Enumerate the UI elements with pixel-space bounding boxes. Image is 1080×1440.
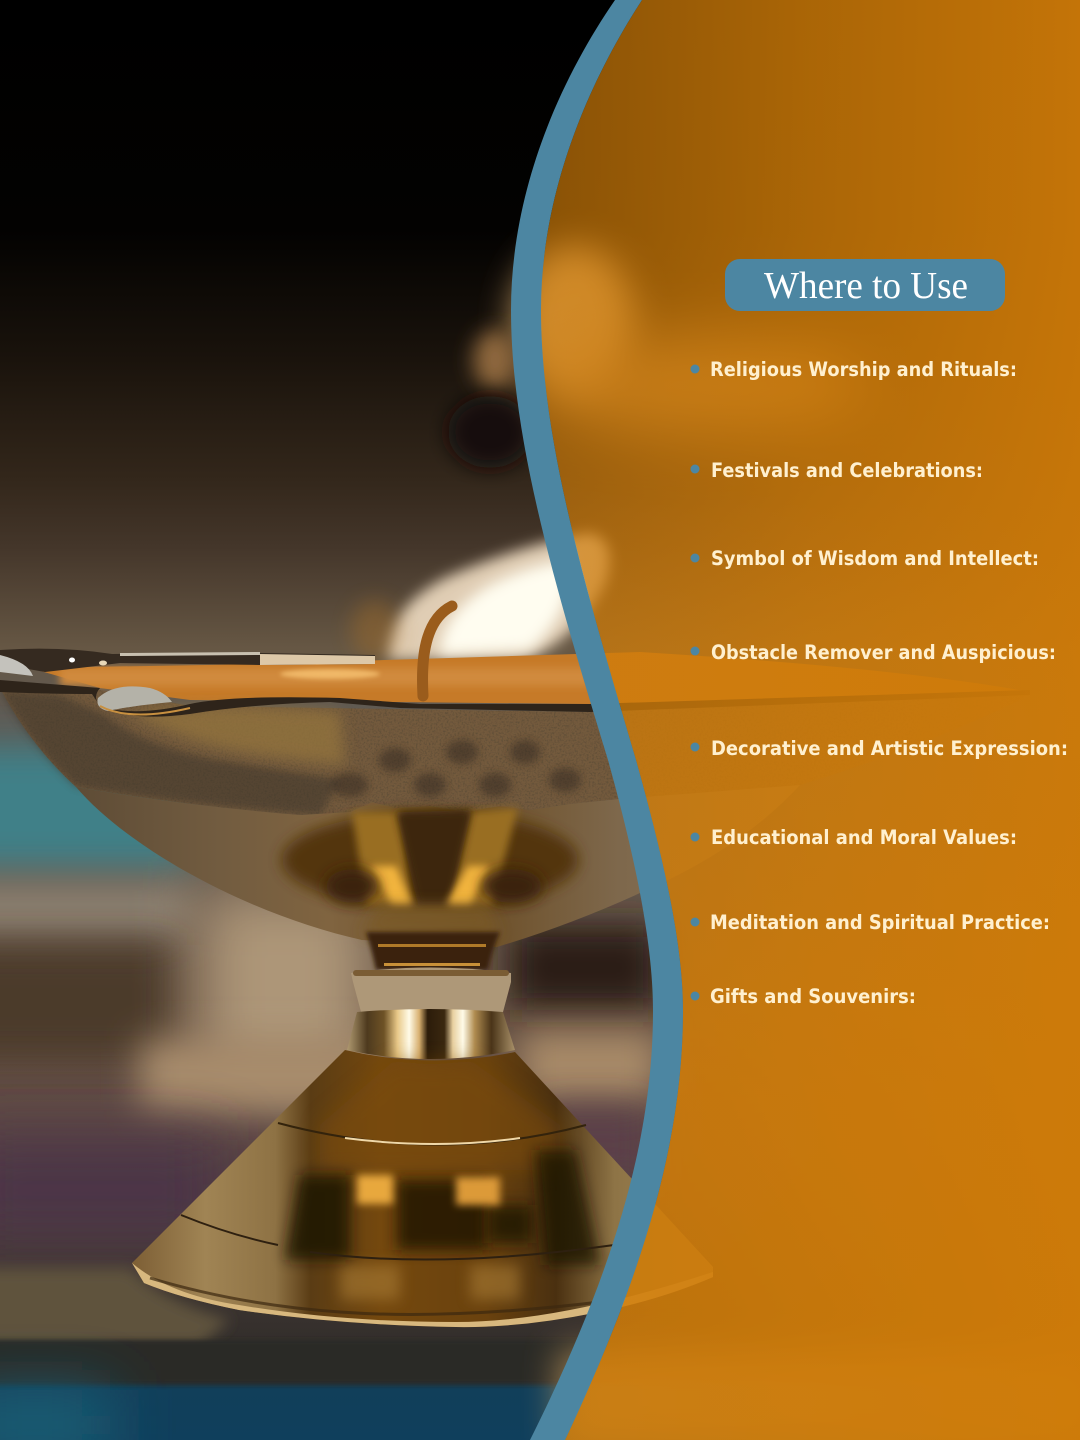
bowl textured band xyxy=(0,688,1030,815)
front rim and lip xyxy=(0,680,1030,717)
bowl band shading xyxy=(0,690,581,815)
background bokeh glow xyxy=(448,245,1080,1440)
brass lamp xyxy=(0,533,1030,1327)
item 6: Educational and Moral Values: xyxy=(711,826,1017,849)
item 2: Festivals and Celebrations: xyxy=(711,459,983,482)
list: uses xyxy=(690,358,1068,1008)
heading: Where to Use xyxy=(725,259,1005,311)
oil surface xyxy=(30,652,1030,704)
item 1: Religious Worship and Rituals: xyxy=(710,358,1017,381)
heading: Where to Use: Where to Use xyxy=(764,265,968,307)
orange overlay panel xyxy=(541,0,1080,1440)
flame xyxy=(351,533,610,660)
foot base rim xyxy=(132,1263,713,1327)
stem rings xyxy=(366,932,500,970)
foot cone xyxy=(132,1050,713,1327)
bowl reflection xyxy=(282,808,578,935)
wick xyxy=(423,606,452,696)
collar xyxy=(347,968,515,1059)
blue curved band xyxy=(511,0,683,1440)
back rim xyxy=(0,649,375,672)
bowl lower xyxy=(76,785,800,947)
item 7: Meditation and Spiritual Practice: xyxy=(710,911,1050,934)
item 8: Gifts and Souvenirs: xyxy=(710,985,916,1008)
item 3: Symbol of Wisdom and Intellect: xyxy=(711,547,1039,570)
